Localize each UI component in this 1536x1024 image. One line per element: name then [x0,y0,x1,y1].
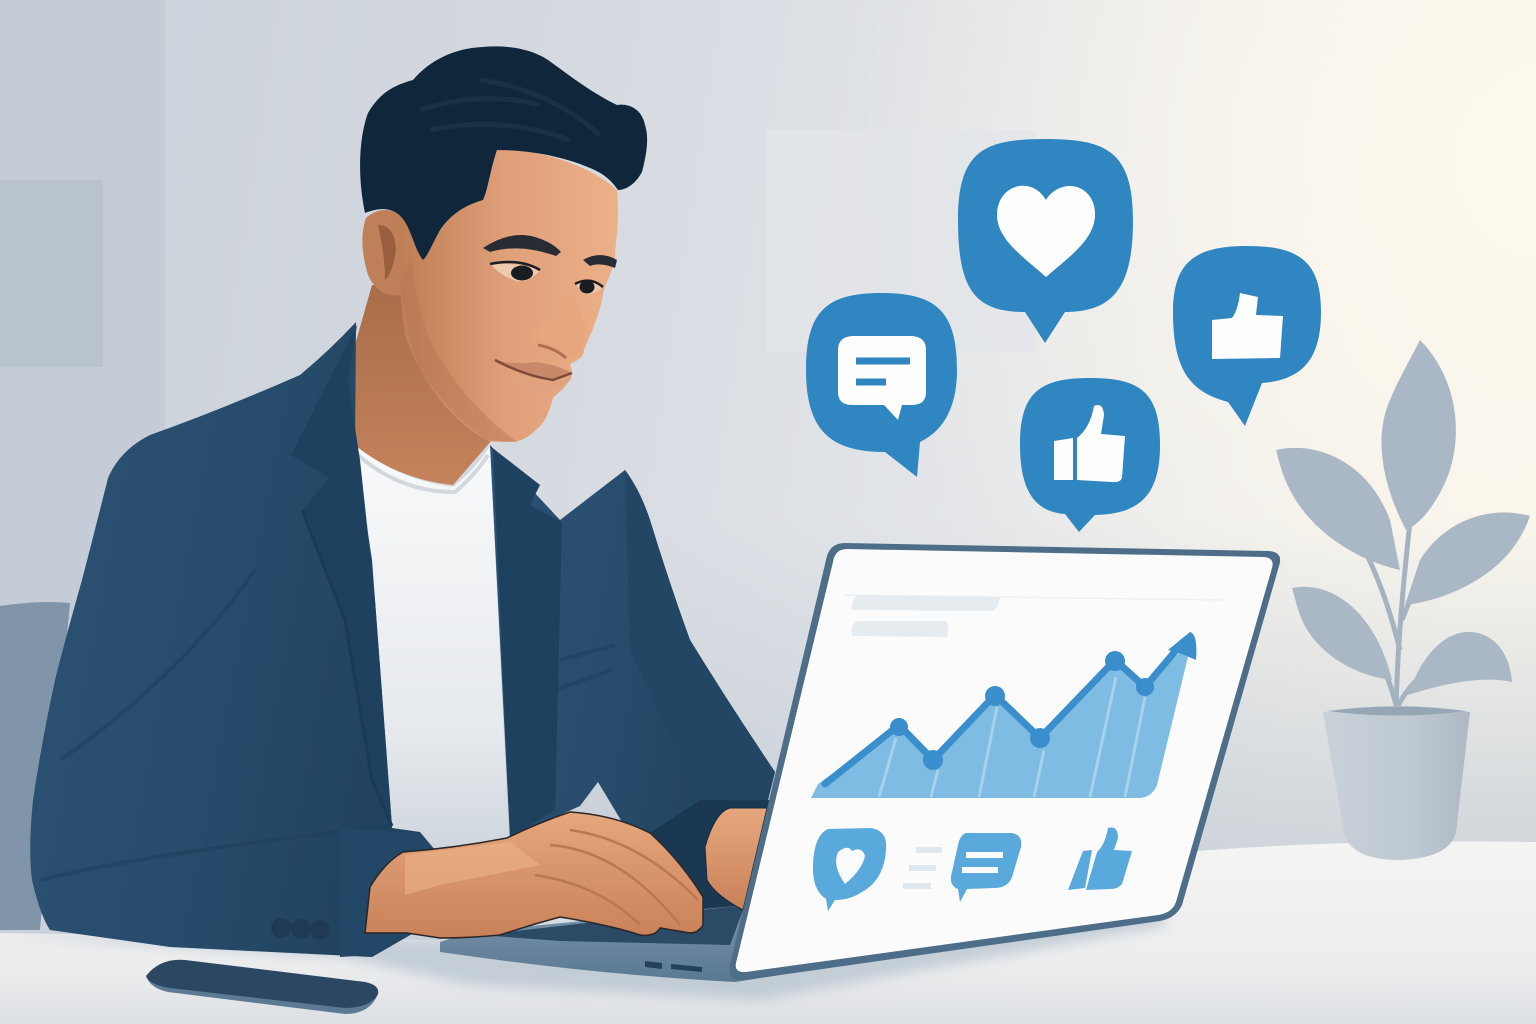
desk [0,841,1536,1024]
inner ear [378,225,396,280]
chart arrow [1168,632,1196,660]
laptop screen [729,543,1280,980]
area chart [811,632,1196,798]
chart gridlines [879,677,1145,797]
screen thumbs-up icon [1068,827,1132,890]
right lapel [490,446,562,838]
screen heart icon [813,828,886,911]
mouth [495,360,572,395]
finger creases [535,830,698,925]
chart markers [890,651,1154,770]
left lapel [291,325,392,826]
arm shading [625,470,775,850]
chair back [0,602,70,930]
thumbs-up bubble, centre [1020,378,1160,532]
plant pot [1323,706,1470,860]
plant stems [1305,430,1500,710]
phone [146,960,378,1014]
jacket [30,322,775,957]
neck [345,285,492,485]
screen comment icon [951,833,1021,902]
left eyebrow [483,235,561,256]
jaw shadow [400,260,517,442]
right eyebrow [583,255,617,268]
forearm highlight [405,842,540,895]
jacket right body [490,445,775,880]
face [399,148,618,442]
heart icon [997,186,1095,277]
right eye [575,280,603,294]
plant leaves [1276,340,1530,695]
shirt collar line [358,455,488,492]
far hand [705,808,767,910]
hair highlight [420,80,600,140]
heart bubble [958,139,1133,343]
thumbs-up icon [1212,293,1283,359]
nostril shadow [538,345,566,358]
cuff buttons [271,918,330,940]
screen dashes [903,850,942,886]
nose [530,295,585,357]
laptop base [440,905,780,982]
sleeve crease [40,570,615,880]
ear [362,210,412,296]
comment bubble [806,293,957,477]
laptop ports [645,961,702,972]
t-shirt [357,446,510,860]
dark area behind far hand [650,800,770,930]
left lapel edge [302,510,392,826]
chart line [825,642,1183,784]
cuff [340,828,435,957]
near hand [365,812,703,938]
placeholder bars [845,595,1222,637]
person [30,46,775,957]
comment icon [838,336,926,420]
left eye [490,262,540,281]
head [360,46,647,442]
hair [360,46,647,260]
thumbs-up icon [1054,405,1125,482]
plant [1276,340,1530,860]
laptop [365,543,1280,982]
thumbs-up bubble, right [1173,246,1321,426]
jacket left body and sleeve [30,322,435,957]
